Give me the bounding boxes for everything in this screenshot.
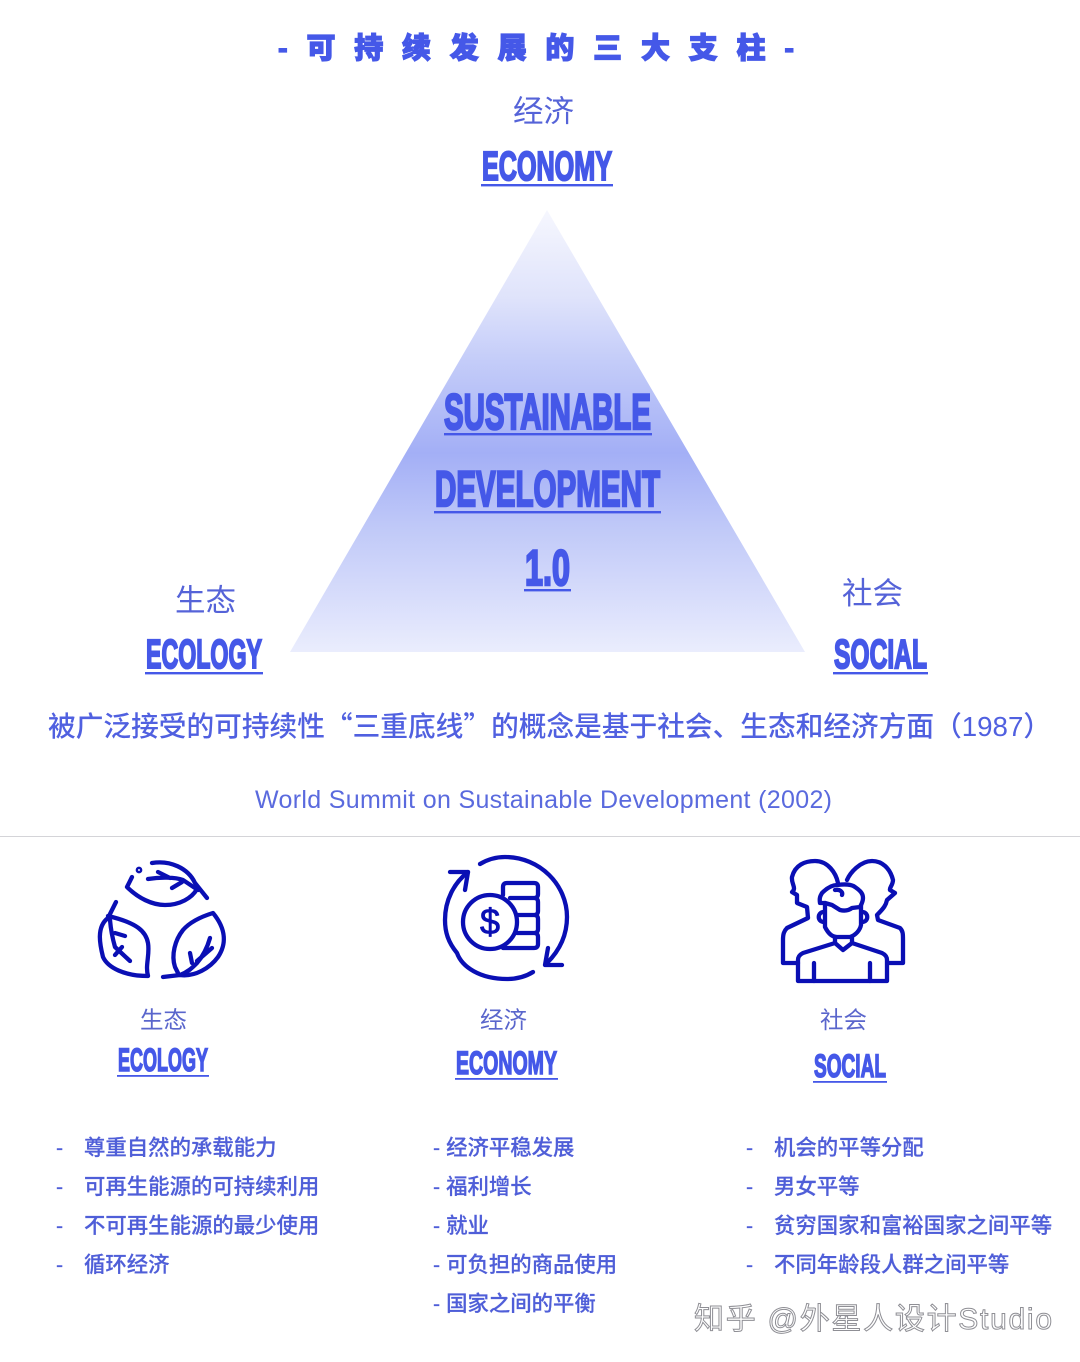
list: ecology: 可再生能源的可持续利用 — [84, 1175, 319, 1199]
triangle — [290, 210, 805, 652]
triple bottom line statement: 被广泛接受的可持续性“三重底线”的概念是基于社会、生态和经济方面（1987） — [48, 704, 1051, 744]
list: social: - — [746, 1175, 753, 1199]
list: ecology: - — [56, 1214, 63, 1238]
list: ecology — [56, 1135, 319, 1277]
list: social: - — [746, 1136, 753, 1160]
list: ecology: - — [56, 1253, 63, 1277]
label: social right: 社会 — [842, 577, 903, 611]
list: ecology: - — [56, 1175, 63, 1199]
label: economy top: 经济 — [513, 95, 574, 129]
label: social right — [833, 577, 928, 677]
list: economy: - 可负担的商品使用 — [433, 1253, 617, 1277]
heading: economy: 经济 — [480, 1007, 527, 1033]
heading: ecology — [117, 1007, 209, 1078]
list: economy — [433, 1136, 617, 1316]
heading: economy — [455, 1007, 558, 1081]
list: ecology: 尊重自然的承载能力 — [84, 1135, 277, 1160]
label: ecology left — [145, 584, 263, 677]
triangle heading: sustainable development 1.0: 1.0 — [525, 540, 570, 596]
label: economy top: ECONOMY — [482, 143, 612, 189]
triangle heading: sustainable development 1.0 — [434, 384, 661, 596]
triangle heading: sustainable development 1.0: DEVELOPMENT — [435, 461, 660, 517]
list: social: 不同年龄段人群之间平等 — [774, 1253, 1009, 1277]
list: social: 贫穷国家和富裕国家之间平等 — [774, 1214, 1052, 1238]
triangle heading: sustainable development 1.0: SUSTAINABLE — [444, 384, 651, 440]
icon: coins with cycle arrows: $ — [480, 901, 500, 942]
heading: social — [813, 1007, 887, 1084]
list: social — [746, 1136, 1052, 1277]
list: economy: - 经济平稳发展 — [433, 1136, 574, 1160]
heading: economy: ECONOMY — [456, 1045, 557, 1081]
heading: ecology: ECOLOGY — [118, 1042, 208, 1078]
icon: group of people — [783, 861, 903, 981]
list: economy: - 福利增长 — [433, 1175, 532, 1199]
title: - 可 持 续 发 展 的 三 大 支 柱 - — [278, 31, 794, 65]
label: ecology left: ECOLOGY — [146, 631, 262, 677]
heading: social: SOCIAL — [814, 1048, 886, 1084]
icon: three leaves cycle — [100, 862, 224, 977]
label: social right: SOCIAL — [834, 631, 927, 677]
list: ecology: 循环经济 — [84, 1253, 170, 1277]
list: social: 男女平等 — [774, 1175, 860, 1199]
list: social: - — [746, 1253, 753, 1277]
label: economy top — [481, 95, 613, 189]
list: ecology: - — [56, 1136, 63, 1160]
label: ecology left: 生态 — [175, 584, 236, 618]
list: social: 机会的平等分配 — [774, 1136, 924, 1160]
icon: coins with cycle arrows — [445, 857, 567, 979]
list: economy: - 就业 — [433, 1214, 489, 1238]
watermark: 知乎 @外星人设计Studio — [694, 1303, 1052, 1336]
heading: social: 社会 — [820, 1007, 867, 1033]
list: ecology: 不可再生能源的最少使用 — [84, 1214, 319, 1238]
list: social: - — [746, 1214, 753, 1238]
heading: ecology: 生态 — [140, 1007, 187, 1033]
world summit caption: World Summit on Sustainable Development (2002) — [255, 786, 832, 814]
list: economy: - 国家之间的平衡 — [433, 1292, 596, 1316]
